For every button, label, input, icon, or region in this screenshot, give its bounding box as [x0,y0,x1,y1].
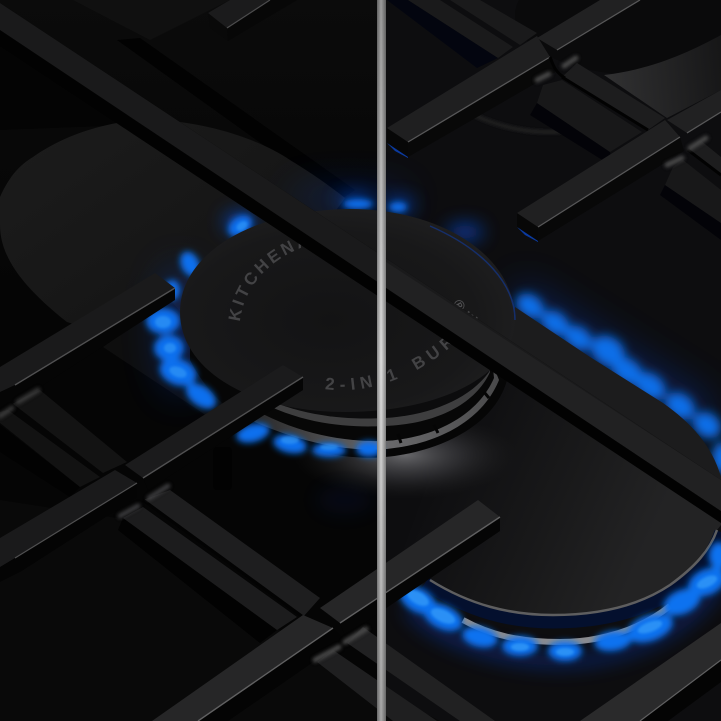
embossed brand text: KITCHENAID [228,240,301,321]
burner ring: main [190,320,507,458]
burner ring: lower right [425,530,721,642]
flames: lower right burner [395,542,721,668]
grate: centre bottom bar [320,500,500,636]
grate: lower left bar [0,470,137,582]
grate: upper right stub two [667,90,721,133]
reflection below main burner [293,411,517,499]
grate: main diagonal bar [0,3,721,523]
grate: bottom continuation bar [152,615,345,721]
lower left rail surface [103,300,262,420]
pot support post [213,447,232,490]
grate: left short bar upper [0,273,175,410]
grate: upper right stub one [537,0,640,78]
dark shadow band upper left [117,38,355,200]
divider line [377,0,386,721]
blue reflection on cooktop [317,486,373,514]
grate: upper right rails [387,0,721,240]
panel: left burner plate [0,121,345,370]
flame glow: main burner [158,188,710,440]
grate: top left stub [208,0,297,41]
upper right burner well [474,0,721,132]
burner plate: right upper piece [500,307,721,520]
panel: right burner plate [400,350,721,615]
grate: left rails [0,390,495,721]
grate: bottom right bar [580,623,721,721]
flames: main burner [146,194,721,474]
grate: left short bar lower [125,365,303,490]
grate: upper right bar two [517,120,684,242]
burner cap: main [180,209,516,412]
grate: upper right bar one [387,36,555,158]
embossed registered mark: ® [448,297,469,315]
faint rear rail upper left [73,0,230,40]
